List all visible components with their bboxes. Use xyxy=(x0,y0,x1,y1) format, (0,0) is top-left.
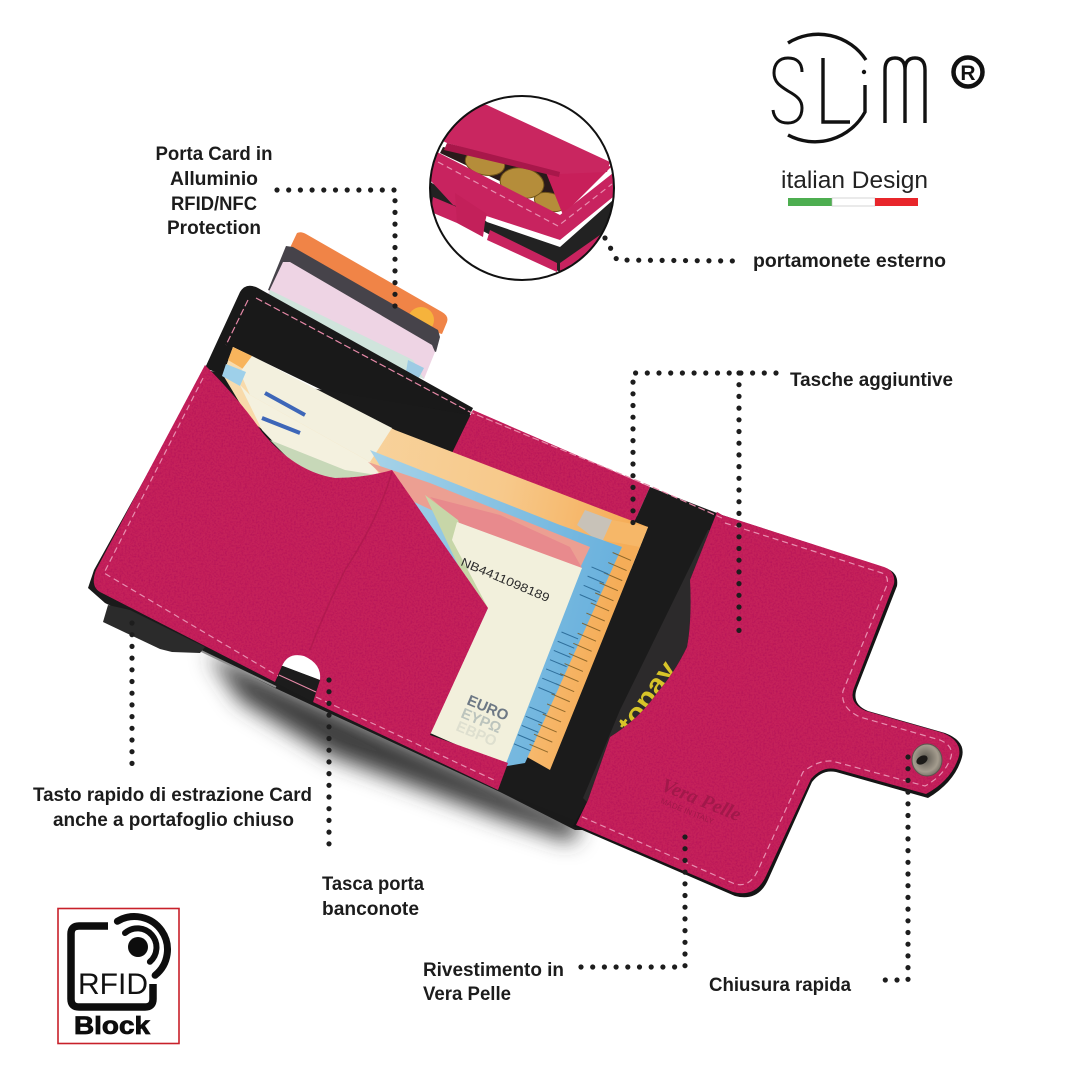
banknote euro labels xyxy=(453,692,511,750)
label xyxy=(156,144,272,239)
label: Tasca porta xyxy=(322,874,424,895)
inset circle: external coin pocket xyxy=(430,96,614,280)
label xyxy=(322,874,424,920)
label: banconote xyxy=(322,899,419,920)
banknote serial: NB4411098189 xyxy=(459,555,552,605)
registered mark: R xyxy=(960,62,976,85)
banknote euro labels: ЕВРО xyxy=(453,718,499,750)
leader xyxy=(605,238,738,261)
lining stitching top xyxy=(226,298,722,518)
leader xyxy=(277,190,395,312)
label: Porta Card in xyxy=(156,144,272,165)
orange note edge ticks xyxy=(538,556,622,750)
callout: Chiusura rapida xyxy=(709,757,908,996)
callout: Porta Card xyxy=(156,144,395,312)
label xyxy=(423,960,564,1005)
callout: Tasche aggiuntive xyxy=(633,370,953,635)
banknote stack xyxy=(222,347,648,770)
panel crease xyxy=(310,472,392,650)
RFID text: RFID xyxy=(78,968,148,1001)
black centre lining xyxy=(498,487,722,832)
right flap with tab xyxy=(573,512,963,897)
stitching xyxy=(104,378,494,780)
embossed brand: Vera Pelle xyxy=(658,774,744,826)
label: Alluminio xyxy=(170,169,258,190)
blue note edge ticks low xyxy=(522,710,538,748)
leader xyxy=(129,623,135,774)
callout: portamonete esterno xyxy=(605,238,946,272)
label: Tasche aggiuntive xyxy=(790,370,953,391)
label: Rivestimento in xyxy=(423,960,564,981)
callout: Rivestimento in Vera Pelle xyxy=(423,837,685,1005)
thumb notch xyxy=(276,655,320,702)
logo: Slim italian Design xyxy=(773,34,982,206)
Block text: Block xyxy=(74,1012,150,1040)
italian flag bar xyxy=(788,198,918,206)
black wallet lining xyxy=(205,286,473,453)
tagline: italian Design xyxy=(781,167,928,194)
blue note edge ticks mid xyxy=(545,635,570,695)
wallet lower black rim xyxy=(88,370,640,830)
label xyxy=(33,785,312,831)
registered mark xyxy=(954,58,982,86)
label: Tasto rapido di estrazione Card xyxy=(33,785,312,806)
top pink strip xyxy=(452,410,650,525)
black extraction button xyxy=(103,605,205,653)
label: RFID/NFC xyxy=(171,194,257,215)
dark card under flap xyxy=(583,530,760,805)
label: Protection xyxy=(167,218,261,239)
label: Vera Pelle xyxy=(423,984,511,1005)
icon: signal waves xyxy=(117,917,167,975)
badge: RFID Block xyxy=(58,908,179,1044)
blue note edge ticks xyxy=(585,570,600,605)
card brand text: topay xyxy=(612,655,683,738)
logo mark: SLiM lettering in circle xyxy=(773,34,925,142)
metal edge xyxy=(195,648,276,687)
leader xyxy=(633,373,776,635)
flap stitching xyxy=(580,523,952,885)
coins xyxy=(464,155,562,212)
label: anche a portafoglio chiuso xyxy=(53,810,294,831)
icon: RFID card xyxy=(71,926,153,1007)
wallet shadow xyxy=(208,652,580,842)
leader xyxy=(580,837,685,967)
callout: Tasto rapido xyxy=(33,623,312,831)
leader xyxy=(878,757,908,980)
snap button xyxy=(912,744,942,776)
label: Chiusura rapida xyxy=(709,975,851,996)
left pocket panel xyxy=(94,365,508,790)
label: portamonete esterno xyxy=(753,251,946,272)
callout: Tasca porta banconote xyxy=(322,680,424,920)
photo: open pink wallet xyxy=(88,232,963,897)
banknote euro labels: EYPΩ xyxy=(458,705,504,737)
leader xyxy=(326,680,332,855)
cards sticking out xyxy=(262,232,447,385)
banknote euro labels: EURO xyxy=(464,692,511,725)
embossed brand: MADE IN ITALY xyxy=(659,797,716,826)
